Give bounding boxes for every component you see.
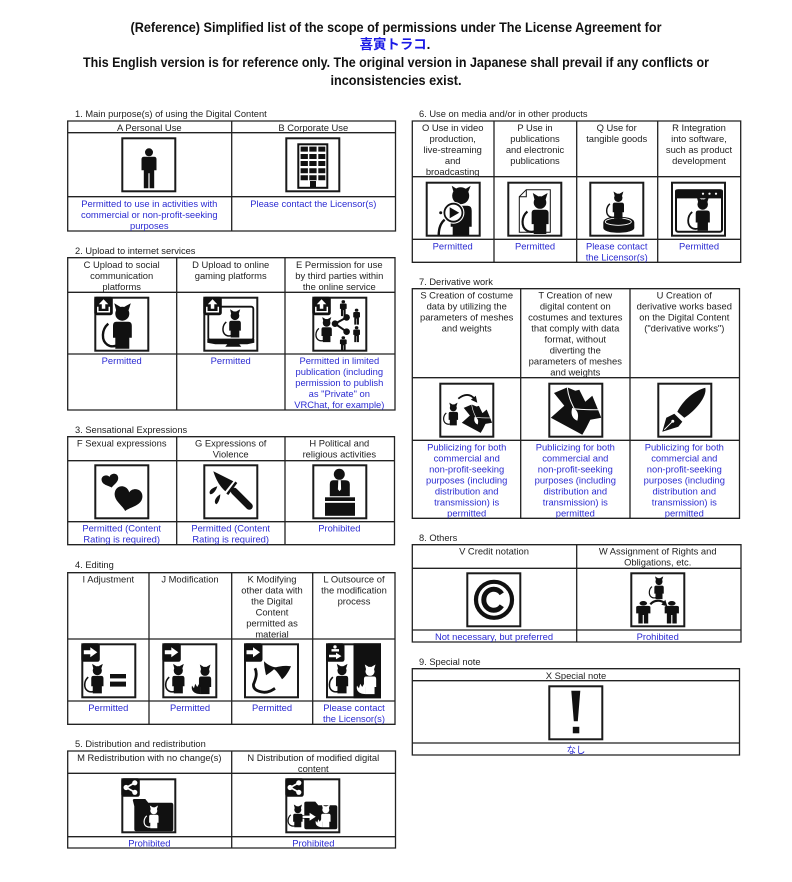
- label K: permitted as: [246, 618, 298, 629]
- section heading 9: 9. Special note: [419, 657, 481, 667]
- icon: exclamation mark: [549, 686, 602, 739]
- label F: F Sexual expressions: [77, 438, 167, 449]
- status L: the Licensor(s): [323, 713, 385, 724]
- label K: K Modifying: [248, 574, 296, 585]
- title: 喜寅トラコ.: [360, 36, 430, 52]
- label S: S Creation of costume: [420, 290, 513, 301]
- column T: [528, 290, 623, 518]
- status N: Prohibited: [292, 838, 334, 848]
- label S: and weights: [442, 323, 492, 334]
- section heading 6: 6. Use on media and/or in other products: [419, 109, 588, 119]
- status S: purposes (including: [426, 474, 507, 485]
- status U: permitted: [665, 507, 704, 518]
- section heading 1: 1. Main purpose(s) of using the Digital Content: [75, 109, 267, 119]
- column V: [435, 546, 553, 642]
- status F: Permitted (Content: [82, 523, 161, 534]
- icon: shared folder: [121, 778, 175, 832]
- panel: 1. Main purpose(s) of using the Digital Content: [68, 109, 395, 231]
- status K: Permitted: [252, 702, 292, 713]
- label U: U Creation of: [657, 290, 712, 301]
- status Q: the Licensor(s): [586, 251, 648, 262]
- column C: [84, 259, 160, 366]
- column I: [81, 574, 135, 713]
- title: This English version is for reference only. The original version in Japanese shall prevail if any conflicts or: [83, 55, 710, 70]
- icon: software window: [672, 183, 725, 236]
- status L: Please contact: [323, 702, 385, 713]
- label J: J Modification: [161, 574, 219, 585]
- label C: C Upload to social: [84, 259, 160, 270]
- table grid 4: [68, 573, 395, 724]
- icon: modification: [162, 643, 216, 697]
- label O: production,: [430, 133, 476, 144]
- status U: commercial and: [651, 452, 717, 463]
- label A: A Personal Use: [117, 122, 182, 133]
- status U: non-profit-seeking: [647, 463, 722, 474]
- panel: 7. Derivative work: [412, 277, 740, 518]
- status T: permitted: [556, 507, 595, 518]
- panel: 6. Use on media and/or in other products: [412, 109, 741, 262]
- label G: Violence: [213, 449, 249, 460]
- icon: speaker at podium: [313, 465, 366, 518]
- label B: B Corporate Use: [278, 122, 348, 133]
- label E: E Permission for use: [296, 259, 383, 270]
- label G: G Expressions of: [195, 438, 266, 449]
- status E: permission to publish: [295, 377, 383, 388]
- status J: Permitted: [170, 702, 210, 713]
- label W: Obligations, etc.: [624, 557, 691, 568]
- status E: as "Private" on: [309, 388, 370, 399]
- icon: sharing with third parties: [312, 297, 366, 351]
- icon: upload avatar: [94, 297, 148, 351]
- section heading 8: 8. Others: [419, 533, 458, 543]
- label O: O Use in video: [422, 122, 483, 133]
- label Q: Q Use for: [597, 122, 637, 133]
- icon: costume: [549, 384, 602, 437]
- status E: Permitted in limited: [299, 355, 379, 366]
- label T: that comply with data: [531, 323, 620, 334]
- status D: Permitted: [211, 355, 251, 366]
- icon: shared modified content: [285, 778, 339, 832]
- status X: なし: [567, 744, 585, 756]
- section heading 2: 2. Upload to internet services: [75, 246, 196, 256]
- label L: L Outsource of: [323, 574, 385, 585]
- icon: assignment between people: [631, 573, 684, 626]
- label T: parameters of meshes: [529, 356, 622, 367]
- status S: commercial and: [434, 452, 500, 463]
- label E: by third parties within: [295, 270, 383, 281]
- label C: platforms: [102, 281, 141, 292]
- status G: Permitted (Content: [191, 523, 270, 534]
- status I: Permitted: [88, 702, 128, 713]
- label P: publications: [510, 155, 560, 166]
- label P: P Use in: [517, 122, 553, 133]
- label M: M Redistribution with no change(s): [77, 752, 221, 763]
- label K: Content: [256, 607, 289, 618]
- title: [83, 20, 710, 88]
- icon: video play over avatar: [427, 183, 480, 236]
- label K: the Digital: [251, 596, 293, 607]
- label U: ("derivative works"): [644, 323, 724, 334]
- table grid 5: [68, 751, 395, 848]
- panel: 5. Distribution and redistribution: [68, 739, 395, 848]
- table grid 8: [412, 545, 741, 642]
- status S: distribution and: [435, 485, 498, 496]
- label H: H Political and: [309, 438, 369, 449]
- label S: data by utilizing the: [427, 301, 507, 312]
- table grid 9: [412, 669, 740, 755]
- status F: Rating is required): [83, 534, 160, 545]
- label T: diverting the: [550, 345, 601, 356]
- column N: [247, 752, 379, 848]
- label K: other data with: [241, 585, 303, 596]
- status V: Not necessary, but preferred: [435, 631, 553, 642]
- status T: commercial and: [542, 452, 608, 463]
- label V: V Credit notation: [459, 546, 529, 557]
- column D: [192, 259, 269, 366]
- status T: purposes (including: [535, 474, 616, 485]
- table grid 6: [412, 121, 741, 262]
- status U: purposes (including: [644, 474, 725, 485]
- status T: distribution and: [544, 485, 607, 496]
- label D: D Upload to online: [192, 259, 269, 270]
- label Q: tangible goods: [586, 133, 648, 144]
- column H: [303, 438, 376, 534]
- label N: N Distribution of modified digital: [247, 752, 379, 763]
- column E: [294, 259, 384, 410]
- column O: [422, 122, 483, 251]
- label O: and: [445, 155, 461, 166]
- label O: broadcasting: [426, 166, 480, 177]
- status E: publication (including: [296, 366, 383, 377]
- column U: [637, 290, 732, 518]
- column L: [321, 574, 387, 724]
- icon: ears and tail parts: [244, 643, 298, 697]
- label U: derivative works based: [637, 301, 732, 312]
- status Q: Please contact: [586, 240, 647, 251]
- label T: T Creation of new: [538, 290, 612, 301]
- column P: [506, 122, 564, 251]
- label P: publications: [510, 133, 560, 144]
- label C: communication: [90, 270, 153, 281]
- label T: format, without: [545, 334, 606, 345]
- icon: person: [122, 138, 175, 191]
- icon: fountain pen: [658, 384, 711, 437]
- label P: and electronic: [506, 144, 564, 155]
- status S: non-profit-seeking: [429, 463, 504, 474]
- status U: distribution and: [653, 485, 716, 496]
- label X: X Special note: [546, 670, 606, 681]
- icon: adjustment equals: [81, 643, 135, 697]
- section heading 7: 7. Derivative work: [419, 277, 493, 287]
- label R: R Integration: [672, 122, 726, 133]
- panel: 3. Sensational Expressions: [68, 425, 394, 545]
- panel: 2. Upload to internet services: [68, 246, 395, 410]
- icon: figure on stand: [590, 183, 643, 236]
- label O: live-streaming: [424, 144, 482, 155]
- column W: [599, 546, 717, 642]
- icon: hearts: [95, 465, 148, 518]
- label E: the online service: [303, 281, 376, 292]
- label L: the modification: [321, 585, 387, 596]
- label R: into software,: [671, 133, 727, 144]
- status A: Permitted to use in activities with: [81, 198, 217, 209]
- label K: material: [255, 629, 289, 640]
- status S: transmission) is: [434, 496, 500, 507]
- label I: I Adjustment: [83, 574, 134, 585]
- status S: permitted: [447, 507, 486, 518]
- table grid 3: [68, 437, 394, 545]
- icon: avatar to costume: [440, 384, 493, 437]
- icon: office building: [286, 138, 339, 191]
- status U: transmission) is: [652, 496, 717, 507]
- column F: [77, 438, 167, 545]
- title: inconsistencies exist.: [330, 73, 462, 88]
- panel: 8. Others: [412, 533, 741, 642]
- status E: VRChat, for example): [294, 399, 384, 410]
- column B Corporate Use: [250, 122, 376, 209]
- panel: 9. Special note: [412, 657, 740, 756]
- status P: Permitted: [515, 240, 555, 251]
- status G: Rating is required): [192, 534, 269, 545]
- column S: [420, 290, 514, 518]
- label T: digital content on: [540, 301, 611, 312]
- status A: commercial or non-profit-seeking: [81, 209, 218, 220]
- label U: on the Digital Content: [639, 312, 730, 323]
- status M: Prohibited: [128, 838, 170, 848]
- panel: 4. Editing: [68, 560, 395, 724]
- label R: development: [672, 155, 726, 166]
- icon: knife with drops: [204, 465, 257, 518]
- label T: and weights: [550, 367, 601, 378]
- label T: costumes and textures: [528, 312, 623, 323]
- section heading 4: 4. Editing: [75, 560, 114, 570]
- table grid 7: [412, 289, 740, 518]
- status O: Permitted: [433, 240, 473, 251]
- section heading 5: 5. Distribution and redistribution: [75, 739, 206, 749]
- status S: Publicizing for both: [427, 441, 506, 452]
- label H: religious activities: [303, 449, 376, 460]
- column Q: [586, 122, 648, 262]
- column K: [241, 574, 303, 713]
- column A Personal Use: [81, 122, 218, 231]
- label S: parameters of meshes: [420, 312, 514, 323]
- status R: Permitted: [679, 240, 719, 251]
- icon: upload to game monitor: [203, 297, 257, 351]
- column R: [666, 122, 732, 251]
- status T: transmission) is: [543, 496, 608, 507]
- status T: non-profit-seeking: [538, 463, 613, 474]
- table grid 1: [68, 121, 395, 231]
- status T: Publicizing for both: [536, 441, 615, 452]
- title: (Reference) Simplified list of the scope of permissions under The License Agreement for: [130, 20, 662, 35]
- status W: Prohibited: [637, 631, 679, 642]
- status H: Prohibited: [318, 523, 360, 534]
- table grid 2: [68, 258, 395, 410]
- label D: gaming platforms: [195, 270, 267, 281]
- label L: process: [338, 596, 371, 607]
- label W: W Assignment of Rights and: [599, 546, 717, 557]
- column J: [161, 574, 219, 713]
- section heading 3: 3. Sensational Expressions: [75, 425, 187, 435]
- icon: publication page: [508, 183, 561, 236]
- status B: Please contact the Licensor(s): [250, 198, 376, 209]
- icon: copyright symbol: [467, 573, 520, 626]
- column M: [77, 752, 221, 848]
- status C: Permitted: [102, 355, 142, 366]
- label N: content: [298, 763, 329, 774]
- label R: such as product: [666, 144, 732, 155]
- status U: Publicizing for both: [645, 441, 724, 452]
- icon: outsource: [326, 643, 381, 698]
- status A: purposes: [130, 220, 169, 231]
- column G: [191, 438, 270, 545]
